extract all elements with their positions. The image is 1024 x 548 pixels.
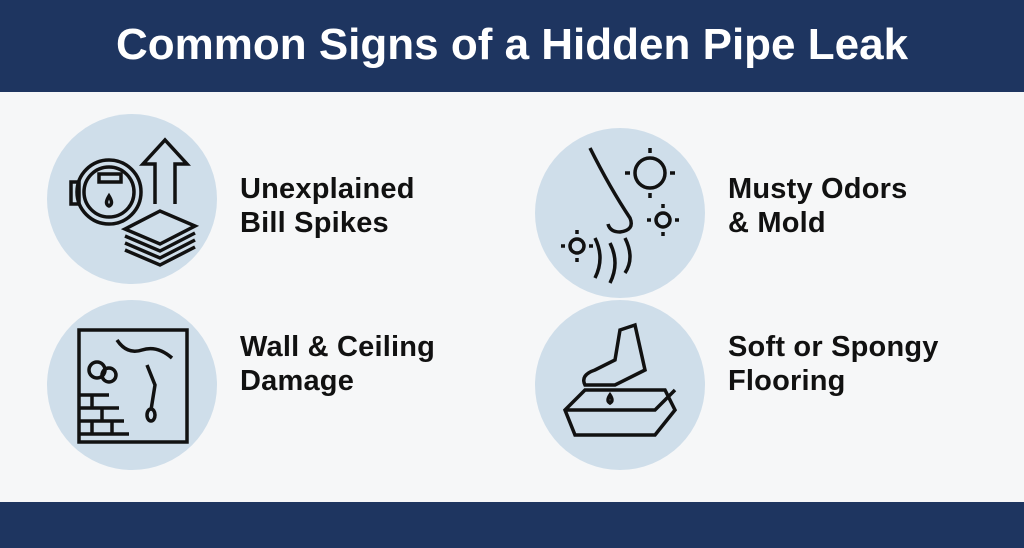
- label: wall damage: [240, 331, 435, 397]
- icon: damaged wall: [47, 300, 217, 470]
- label: wall damage: Wall & Ceiling: [240, 331, 435, 363]
- icon: foot on spongy floor: [535, 300, 705, 470]
- label: soft flooring: Soft or Spongy: [728, 331, 939, 363]
- label: bill spikes: Bill Spikes: [240, 207, 389, 239]
- header band: [0, 0, 1024, 92]
- icon: water meter and money: [47, 114, 217, 284]
- label: wall damage: Damage: [240, 365, 354, 397]
- footer band: [0, 502, 1024, 548]
- label: musty odors: & Mold: [728, 207, 826, 239]
- label: musty odors: [728, 173, 907, 239]
- label: musty odors: Musty Odors: [728, 173, 907, 205]
- title: Common Signs of a Hidden Pipe Leak: [116, 20, 908, 69]
- label: bill spikes: Unexplained: [240, 173, 415, 205]
- label: soft flooring: Flooring: [728, 365, 846, 397]
- icon: nose and mold spores: [535, 128, 705, 298]
- label: soft flooring: [728, 331, 939, 397]
- label: bill spikes: [240, 173, 415, 239]
